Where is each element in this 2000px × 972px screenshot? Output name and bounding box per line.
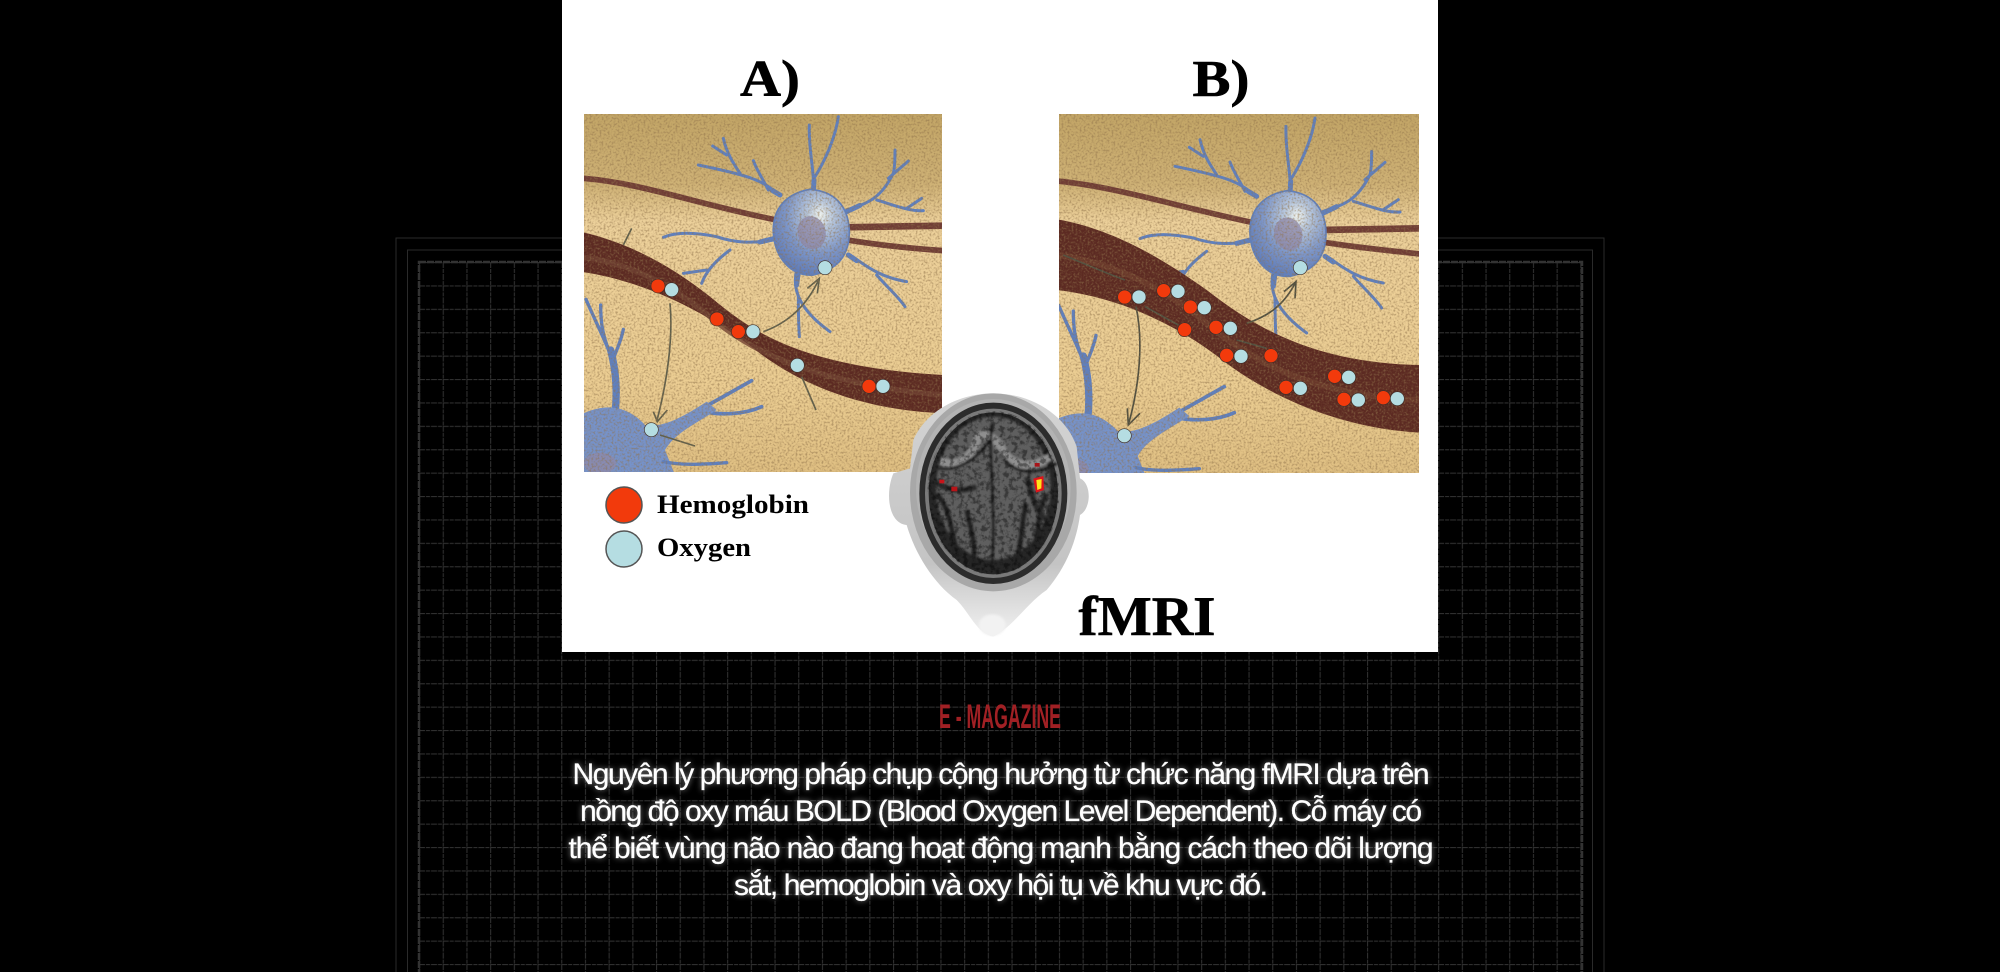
- nose: [979, 614, 1006, 636]
- legend item: hemoglobin: Hemoglobin: [657, 490, 810, 519]
- legend item: oxygen: [606, 531, 752, 567]
- main blood vessel: [580, 232, 943, 413]
- panel A: resting neurons and blood vessel: [580, 114, 943, 475]
- thin vessels: [583, 178, 943, 251]
- brain scan: [889, 393, 1089, 637]
- body text: thể biết vùng não nào đang hoạt động mạnh bằng cách theo dõi lượng: [568, 832, 1434, 865]
- hemoglobin and oxygen particles: [644, 261, 890, 437]
- label: fMRI: fMRI: [1078, 586, 1216, 648]
- thin vessels: [1057, 181, 1420, 254]
- upper neuron: [663, 117, 923, 337]
- arrows: [623, 228, 819, 446]
- background grid frame: [396, 238, 1604, 972]
- heading: B): B): [1192, 51, 1250, 108]
- activation spots: [939, 463, 1044, 493]
- legend: [606, 487, 810, 567]
- upper neuron: [1140, 118, 1400, 338]
- legend item: hemoglobin: [606, 487, 810, 523]
- brain texture: [928, 411, 1059, 575]
- lower neuron: [580, 299, 762, 475]
- body text: sắt, hemoglobin và oxy hội tụ về khu vực đó.: [734, 869, 1268, 902]
- ears and head surface: [889, 393, 1089, 637]
- dilated blood vessel: [1057, 219, 1420, 433]
- kicker: E - MAGAZINE: E - MAGAZINE: [939, 698, 1061, 736]
- heading: A): A): [740, 51, 800, 108]
- body text: nồng độ oxy máu BOLD (Blood Oxygen Level Dependent). Cỗ máy có: [580, 795, 1422, 828]
- body text: Nguyên lý phương pháp chụp cộng hưởng từ chức năng fMRI dựa trên: [572, 758, 1430, 791]
- arrows: [1063, 255, 1296, 425]
- lower neuron: [1053, 305, 1234, 481]
- body text: [568, 758, 1434, 902]
- legend item: oxygen: Oxygen: [657, 533, 752, 562]
- brain tissue and folds: [932, 417, 1057, 567]
- skull ring: [910, 393, 1077, 591]
- panel B: active neurons and dilated blood vessel: [1053, 114, 1420, 481]
- dark cortex margin: [919, 403, 1067, 584]
- white figure panel: [562, 0, 1438, 652]
- hemoglobin and oxygen particles: [1117, 261, 1404, 443]
